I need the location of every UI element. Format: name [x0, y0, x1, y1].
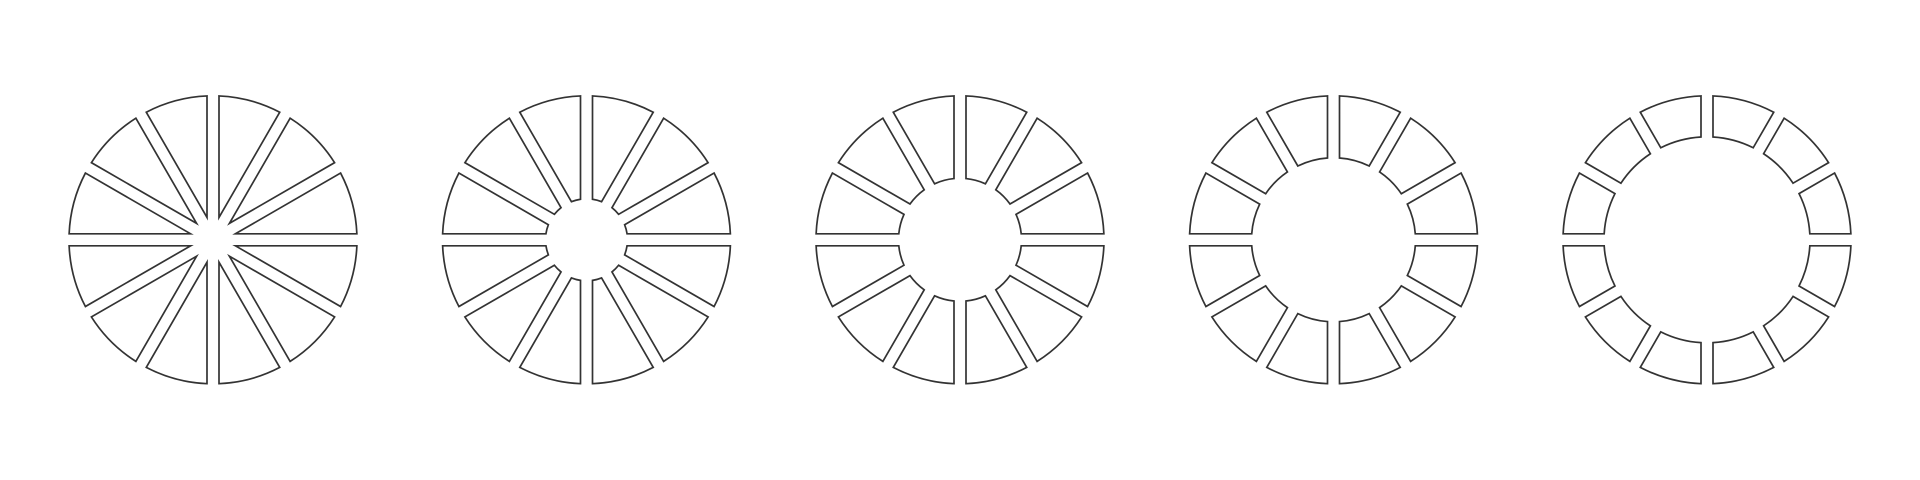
chart: 12-segment donut with medium hole — [802, 82, 1118, 398]
chart: 12-segment thin ring with largest hole — [1549, 82, 1865, 398]
chart: 12-segment pie with no centre hole — [55, 82, 371, 398]
chart: 12-segment donut with small hole — [429, 82, 744, 398]
chart: 12-segment donut with large hole — [1176, 82, 1491, 398]
